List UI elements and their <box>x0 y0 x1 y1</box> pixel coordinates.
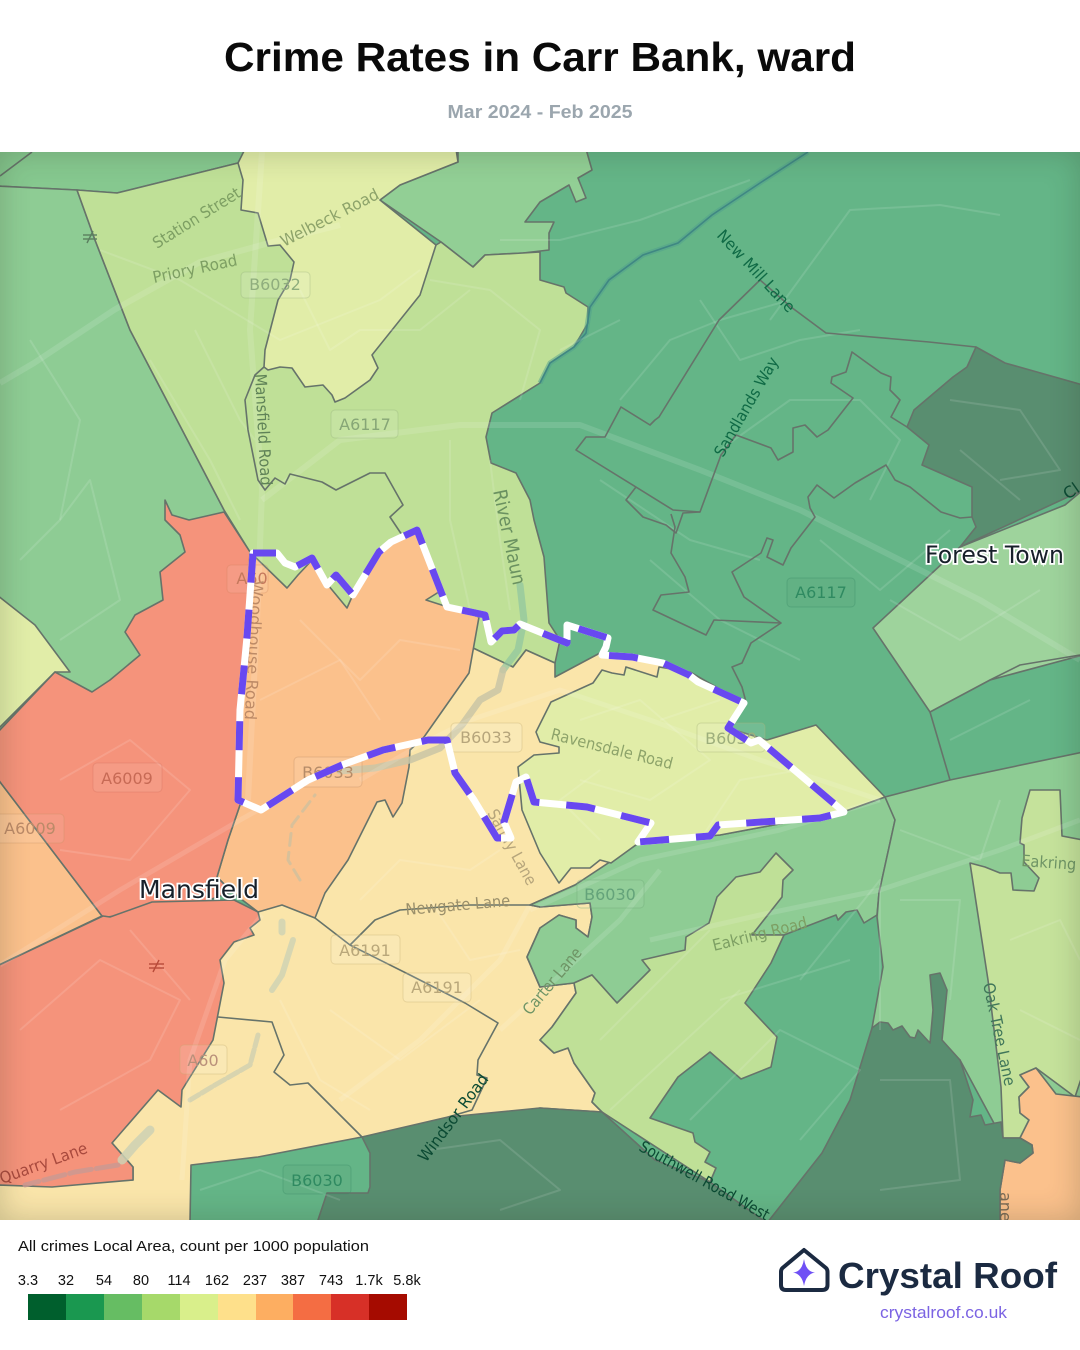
road name labels: Welbeck Road <box>277 185 382 251</box>
legend colour swatches <box>28 1294 407 1320</box>
road shields: A60 <box>187 1051 219 1070</box>
title: Crime Rates in Carr Bank, ward <box>224 34 856 80</box>
road shields: A6117 <box>339 415 391 434</box>
river: Maun through town and lakes <box>25 585 524 1185</box>
map edge vignette <box>0 152 1080 1220</box>
legend scale labels: 5.8k <box>393 1273 421 1289</box>
road shields: A6191 <box>411 978 463 997</box>
place label: Forest Town: Forest Town <box>925 541 1064 569</box>
road name labels <box>0 183 1080 1224</box>
road shields: A6191 <box>339 941 391 960</box>
road name labels: New Mill Lane <box>713 226 799 316</box>
road name labels: Station Street <box>149 183 244 252</box>
road name labels: Woodhouse Road <box>241 580 267 721</box>
logo: Crystal Roof house icon <box>781 1250 828 1290</box>
road shields: A60 <box>236 569 268 588</box>
road shields: A6009 <box>4 819 56 838</box>
road name labels: Sandlands Way <box>710 354 782 460</box>
legend scale labels: 54 <box>96 1273 112 1289</box>
legend scale labels: 80 <box>133 1273 149 1289</box>
road shields: B6030 <box>291 1171 343 1190</box>
road name labels: ane <box>996 1192 1015 1222</box>
road shields: A6117 <box>795 583 847 602</box>
road name labels: Windsor Road <box>414 1070 492 1165</box>
road name labels: Mansfield Road <box>251 373 276 486</box>
road shields: B6030 <box>584 885 636 904</box>
logo: website url: crystalroof.co.uk <box>880 1304 1008 1322</box>
river: Maun upper course <box>540 152 808 383</box>
legend scale labels: 32 <box>58 1273 74 1289</box>
logo: Crystal Roof wordmark: Crystal Roof <box>838 1255 1058 1296</box>
legend scale labels: 743 <box>319 1273 343 1289</box>
legend scale labels: 162 <box>205 1273 229 1289</box>
legend title: All crimes Local Area, count per 1000 population <box>18 1239 369 1255</box>
road name labels: Newgate Lane <box>405 891 511 919</box>
road name labels: Priory Road <box>151 250 239 287</box>
subtitle: date range: Mar 2024 - Feb 2025 <box>448 102 632 122</box>
road name labels: Sandy Lane <box>484 806 541 888</box>
road shields: A6009 <box>101 769 153 788</box>
road shields: B6033 <box>302 763 354 782</box>
map <box>0 152 1080 1224</box>
regions: choropleth areas <box>0 149 1080 1223</box>
road name labels: Eakring Road <box>710 913 809 955</box>
road shields: B6030 <box>705 729 757 748</box>
road shields <box>0 272 855 1194</box>
icon: rail station north <box>83 231 97 243</box>
road name labels: Ravensdale Road <box>549 724 675 773</box>
road name labels: Oak Tree Lane <box>979 981 1020 1088</box>
road name labels: River Maun <box>488 487 530 587</box>
road name labels: Carter Lane <box>519 944 586 1019</box>
legend scale labels: 237 <box>243 1273 267 1289</box>
legend scale labels: 114 <box>167 1273 191 1289</box>
legend scale labels: 3.3 <box>18 1273 38 1289</box>
legend scale labels: 1.7k <box>355 1273 383 1289</box>
ward boundaries: internal lines <box>0 152 1080 1137</box>
road shields: B6032 <box>249 275 301 294</box>
icon: rail station Mansfield <box>149 960 164 972</box>
ward outline: Carr Bank dashed boundary <box>238 530 844 842</box>
legend scale labels: 387 <box>281 1273 305 1289</box>
streets: faint road network <box>0 152 1080 1210</box>
place label: Mansfield: Mansfield <box>139 875 259 904</box>
legend scale labels <box>18 1273 421 1289</box>
road shields: B6033 <box>460 728 512 747</box>
